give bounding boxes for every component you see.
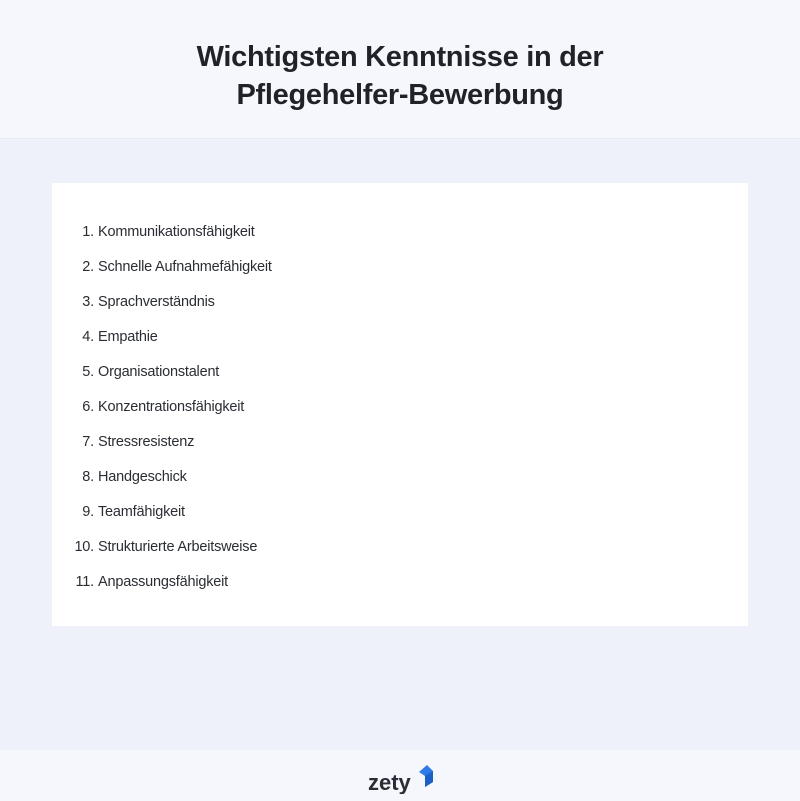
panel: skills list — [52, 183, 748, 626]
logo: zety — [368, 765, 433, 794]
item 8: 8. — [82, 469, 94, 485]
title: Wichtigsten Kenntnisse in der — [197, 41, 603, 73]
item 4: 4. — [82, 329, 94, 345]
item 2: 2. — [82, 259, 94, 275]
item 3: 3. — [82, 294, 94, 310]
item 11: 11. — [76, 574, 94, 590]
item 10: 10. — [74, 539, 94, 555]
item 8: Handgeschick — [98, 469, 187, 485]
item 7: Stressresistenz — [98, 434, 194, 450]
item 6: 6. — [82, 399, 94, 415]
header — [0, 0, 800, 139]
item 2: Schnelle Aufnahmefähigkeit — [98, 259, 272, 275]
item 5: Organisationstalent — [98, 364, 219, 380]
item 7: 7. — [82, 434, 94, 450]
item 4: Empathie — [98, 329, 158, 345]
item 11: Anpassungsfähigkeit — [98, 574, 228, 590]
title — [196, 41, 604, 111]
item 1: Kommunikationsfähigkeit — [98, 224, 255, 240]
title: Pflegehelfer-Bewerbung — [237, 79, 563, 111]
item 3: Sprachverständnis — [98, 294, 215, 310]
item 9: 9. — [82, 504, 94, 520]
item 6: Konzentrationsfähigkeit — [98, 399, 244, 415]
item 9: Teamfähigkeit — [98, 504, 185, 520]
item 10: Strukturierte Arbeitsweise — [98, 539, 257, 555]
item 1: 1. — [82, 224, 94, 240]
item 5: 5. — [82, 364, 94, 380]
footer — [0, 750, 800, 801]
